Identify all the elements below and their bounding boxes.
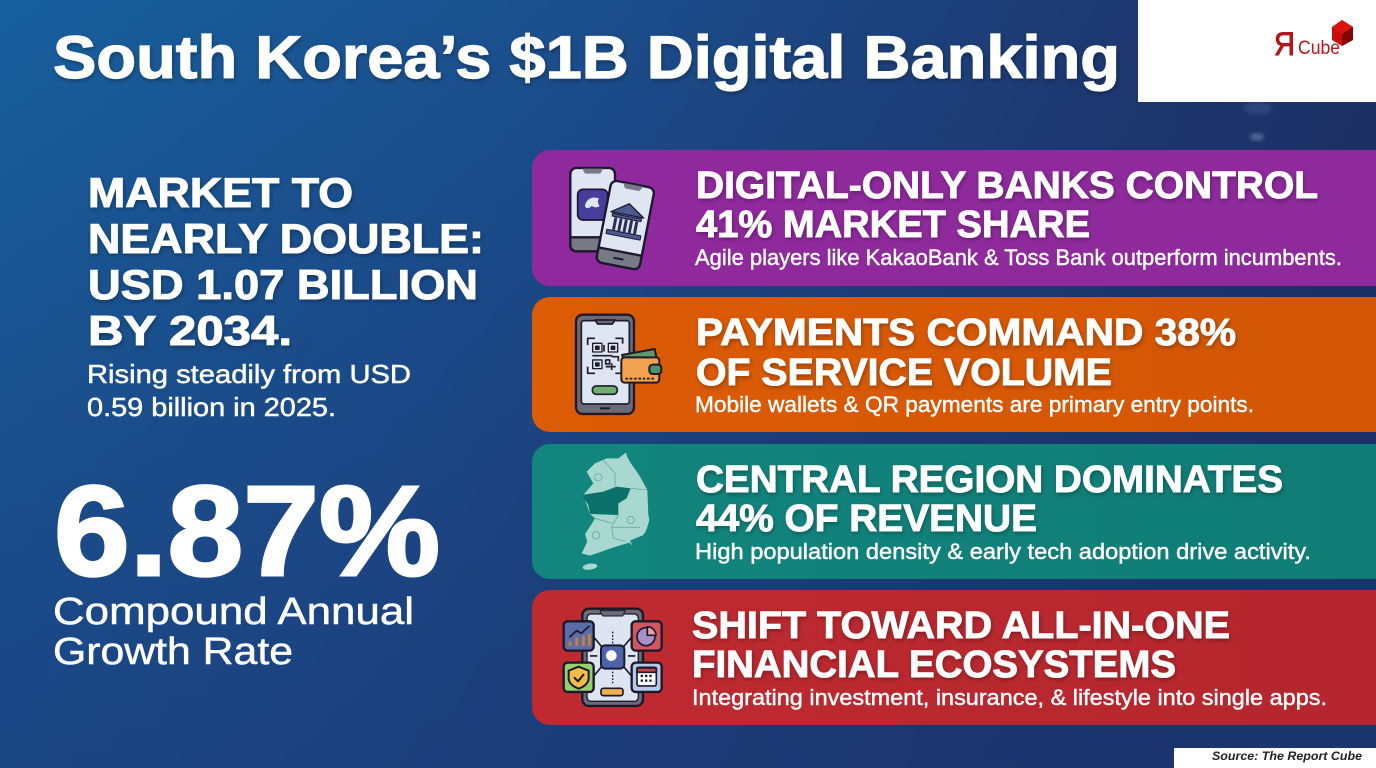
market headline: NEARLY DOUBLE: bbox=[88, 215, 484, 262]
icon: two phones with bank bbox=[570, 168, 655, 270]
CAGR figure: 6.87% bbox=[54, 460, 440, 603]
logo letter and word: Cube bbox=[1298, 38, 1340, 59]
market headline bbox=[88, 169, 484, 354]
CAGR label: Compound Annual bbox=[53, 591, 414, 633]
market headline: MARKET TO bbox=[88, 169, 353, 216]
market headline: BY 2034. bbox=[88, 307, 292, 354]
market subtext bbox=[87, 359, 411, 422]
heading: SHIFT TOWARD ALL-IN-ONE bbox=[692, 605, 1230, 647]
logo letter and word: Я bbox=[1274, 26, 1295, 62]
market subtext: Rising steadily from USD bbox=[87, 359, 411, 389]
panel: central region bbox=[532, 444, 1376, 579]
heading: OF SERVICE VOLUME bbox=[696, 352, 1112, 394]
source note: Source: The Report Cube bbox=[1212, 749, 1362, 763]
market subtext: 0.59 billion in 2025. bbox=[87, 392, 336, 422]
panel: payments bbox=[532, 297, 1376, 432]
description: Agile players like KakaoBank & Toss Bank outperform incumbents. bbox=[695, 245, 1342, 270]
heading: CENTRAL REGION DOMINATES bbox=[696, 459, 1283, 501]
logo box bbox=[1138, 0, 1376, 102]
heading: 41% MARKET SHARE bbox=[696, 204, 1090, 246]
heading: 44% OF REVENUE bbox=[696, 498, 1037, 540]
icon: phone with QR and wallet bbox=[576, 315, 661, 414]
heading: DIGITAL-ONLY BANKS CONTROL bbox=[696, 165, 1318, 207]
heading bbox=[696, 165, 1318, 246]
heading: FINANCIAL ECOSYSTEMS bbox=[692, 644, 1176, 686]
logo letter and word bbox=[1274, 26, 1340, 62]
description: Integrating investment, insurance, & lifestyle into single apps. bbox=[692, 685, 1327, 710]
CAGR label: Growth Rate bbox=[53, 631, 293, 673]
heading bbox=[696, 459, 1283, 540]
market headline: USD 1.07 BILLION bbox=[88, 261, 478, 308]
CAGR label bbox=[53, 591, 414, 673]
heading: PAYMENTS COMMAND 38% bbox=[696, 312, 1236, 354]
description: Mobile wallets & QR payments are primary entry points. bbox=[695, 392, 1254, 417]
title: South Korea’s $1B Digital Banking bbox=[53, 24, 1120, 91]
icon: map of South Korea bbox=[582, 453, 649, 571]
logo cube bbox=[1332, 20, 1353, 46]
description: High population density & early tech adoption drive activity. bbox=[695, 539, 1311, 564]
heading bbox=[696, 312, 1236, 394]
panel: all-in-one ecosystems bbox=[532, 590, 1376, 725]
source note bbox=[1174, 748, 1376, 768]
icon: super-app phone bbox=[564, 609, 662, 706]
panel: digital-only banks bbox=[532, 150, 1376, 286]
heading bbox=[692, 605, 1230, 686]
